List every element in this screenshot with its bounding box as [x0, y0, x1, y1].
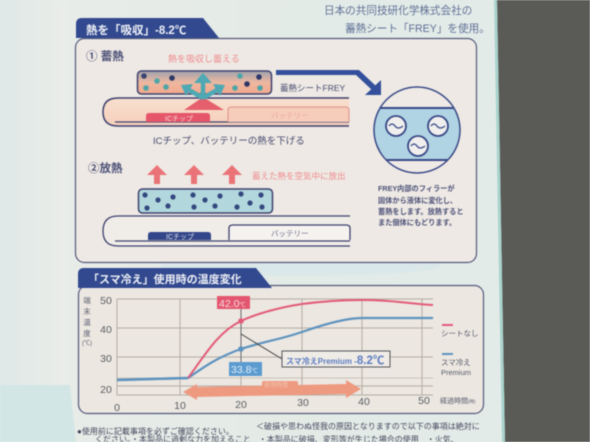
footer notes: ＜破損や思わぬ怪我の原因となりますので以下の事項は絶対に — [256, 421, 480, 431]
diagram: device with hot components: ICチップ — [165, 115, 193, 123]
diagram: device cooled: ICチップ — [166, 233, 194, 241]
diagram: device cooled — [103, 216, 350, 246]
y axis title: (℃) — [82, 340, 92, 347]
text: FREY filler explanation — [378, 184, 464, 227]
callout: 33.8: 33.8℃ — [231, 364, 257, 376]
axis numbers: 0 — [114, 402, 120, 414]
legend: シートなし — [441, 329, 478, 338]
caption: release stored heat: 蓄えた熱を空気中に放出 — [252, 171, 346, 181]
axis numbers: 30 — [100, 353, 112, 365]
series: no sheet — [188, 300, 433, 378]
icon: FREY magnified circle — [370, 87, 464, 173]
x axis title: 経過時間(時) — [440, 396, 476, 405]
callout: Premium minus 8.2: スマ冷えPremium -8.2℃ — [286, 355, 385, 367]
axis numbers — [100, 295, 430, 414]
heading tab: absorb: 熱を「吸収」-8.2℃ — [86, 23, 187, 37]
axis numbers: 20 — [100, 384, 112, 396]
panel: heat absorption and release — [76, 18, 476, 262]
caption: absorb and store heat: 熱を吸収し蓄える — [168, 53, 240, 64]
axis numbers: 40 — [100, 324, 112, 336]
callout: 42.0 — [217, 296, 250, 310]
text: FREY filler explanation: 蓄熱をします。放熱すると — [378, 207, 464, 216]
duration arrow: 使用時間 — [264, 381, 288, 389]
footer notes: ●使用前に記載事項を必ずご確認ください。 — [77, 426, 234, 436]
text: FREY filler explanation: また個体にもどります。 — [378, 218, 456, 227]
axis numbers: 50 — [418, 395, 430, 407]
axis numbers: 10 — [174, 400, 186, 412]
heading: step 2 heat release: ②放熱 — [88, 161, 123, 175]
header text: joint development: 蓄熱シート「FREY」を使用。 — [345, 22, 490, 35]
text: FREY filler explanation: 固体から液体に変化し、 — [378, 196, 457, 205]
caption: lowers chip and battery heat: ICチップ、バッテリーの熱を下げる — [153, 135, 305, 147]
header text: joint development — [324, 4, 490, 35]
callout: Premium minus 8.2 — [282, 351, 390, 367]
legend: Premium — [441, 368, 471, 377]
y axis title: 温 — [83, 318, 91, 327]
header text: joint development: 日本の共同技研化学株式会社の — [324, 4, 472, 17]
diagram: device with hot components: バッテリー — [271, 111, 308, 120]
text: FREY filler explanation: FREY内部のフィラーが — [378, 184, 455, 193]
heading tab: temperature change — [78, 268, 272, 288]
panel: temperature chart — [78, 268, 484, 414]
arrow: to FREY detail — [276, 70, 381, 95]
icons: three rising heat arrows — [147, 165, 242, 184]
diagram: FREY sheet absorbing — [138, 71, 272, 94]
legend — [441, 325, 478, 377]
y axis title: 末 — [83, 306, 91, 316]
y axis title — [82, 295, 92, 347]
legend: スマ冷え — [441, 357, 471, 367]
line chart — [100, 295, 433, 414]
diagram: FREY sheet cooled — [138, 189, 272, 213]
y axis title: 端 — [83, 295, 91, 305]
heading tab: temperature change: 「スマ冷え」使用時の温度変化 — [88, 272, 242, 286]
axis numbers: 30 — [297, 397, 309, 409]
callout: 33.8 — [229, 362, 262, 376]
heading tab: absorb — [76, 18, 219, 38]
axis numbers: 40 — [358, 396, 370, 408]
callout: 42.0: 42.0℃ — [219, 298, 245, 310]
duration arrow — [183, 380, 361, 400]
axis numbers: 50 — [100, 295, 112, 307]
diagram: device with hot components — [103, 98, 349, 126]
heading: step 1 heat storage: ① 蓄熱 — [86, 49, 124, 63]
markers and connectors — [238, 309, 282, 375]
axis numbers: 20 — [235, 399, 247, 411]
y axis title: 度 — [83, 328, 91, 338]
icon: heat rising triangle — [184, 97, 224, 110]
icon: teal absorption arrows — [181, 73, 225, 99]
diagram: device cooled: バッテリー — [271, 229, 308, 238]
series: Premium — [117, 318, 433, 380]
label: FREY sheet: 蓄熱シートFREY — [280, 83, 346, 93]
footer notes — [77, 421, 480, 442]
